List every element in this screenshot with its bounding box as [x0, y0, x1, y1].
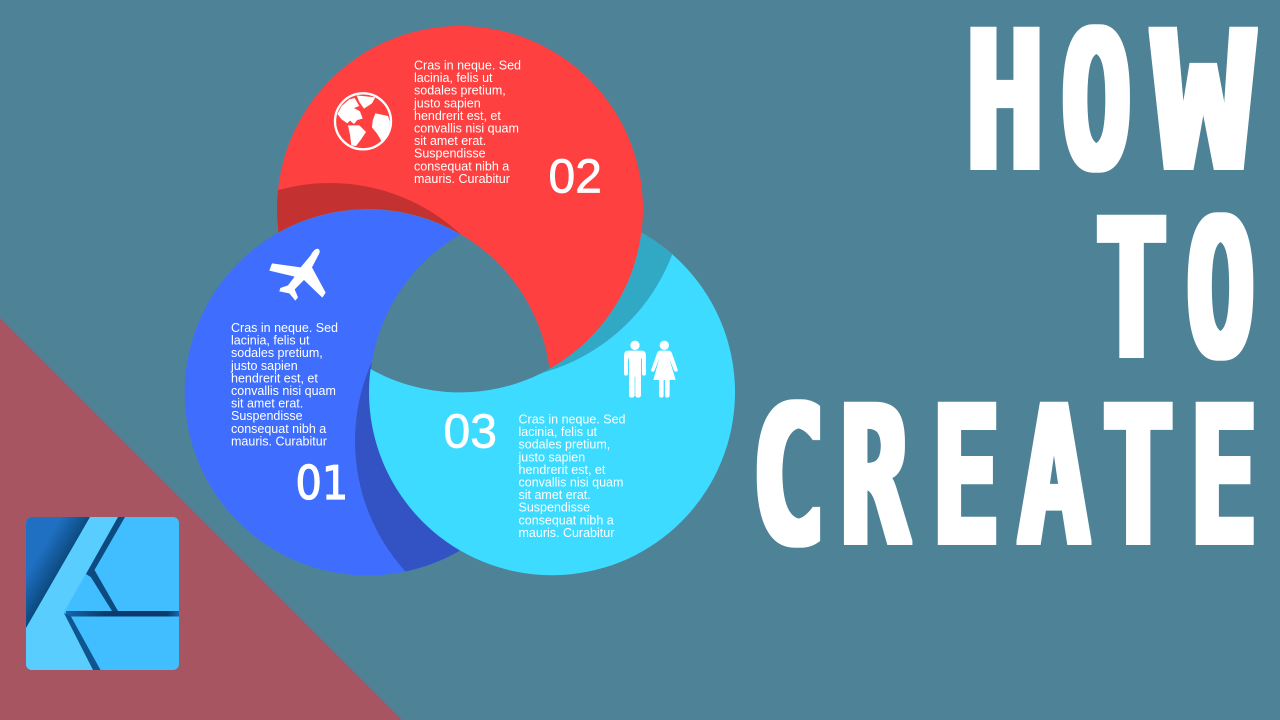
text block 02: sit amet erat. [414, 134, 486, 148]
text block 03: mauris. Curabitur [518, 526, 614, 540]
text block 02: hendrerit est, et [414, 109, 501, 123]
text block 03: lacinia, felis ut [518, 425, 598, 439]
title: HOW TO CREATE [751, 0, 1258, 589]
title line: HOW [964, 0, 1258, 214]
red segment shadow [277, 183, 460, 234]
title line: TO: O [1186, 180, 1254, 402]
text block 02: convallis nisi quam [414, 122, 519, 136]
title line: CREATE: E [1190, 367, 1257, 589]
text block 01: sit amet erat. [231, 397, 303, 411]
title line: CREATE: R [840, 367, 909, 589]
text block 02: justo sapien [413, 96, 481, 110]
text block 03: justo sapien [518, 450, 585, 464]
title line: CREATE: T [1102, 367, 1175, 589]
icon: Affinity Designer logo [26, 517, 179, 670]
text block 01: hendrerit est, et [231, 371, 318, 385]
icon: airplane [269, 249, 326, 301]
panel 02: red crescent [277, 26, 643, 368]
text block 01: justo sapien [230, 359, 298, 373]
title line: TO: T [1095, 180, 1168, 402]
cyan segment shadow [542, 232, 672, 373]
number 02: 02 [548, 150, 602, 204]
title line: TO [1095, 180, 1254, 402]
text block 02: consequat nibh a [414, 159, 509, 173]
infographic artwork [0, 26, 735, 720]
icon: globe [335, 93, 391, 149]
background red triangle [0, 318, 402, 720]
blue segment shape [185, 210, 460, 576]
title line: CREATE: C [751, 367, 826, 589]
text block 02: mauris. Curabitur [414, 172, 510, 186]
number 03: 03 [444, 406, 497, 458]
title line: CREATE: E [932, 367, 1000, 589]
text block 03: hendrerit est, et [518, 463, 606, 477]
text block 01: consequat nibh a [231, 422, 326, 436]
text block 01: Cras in neque. Sed [231, 321, 338, 335]
text block 03: consequat nibh a [518, 513, 614, 527]
text block 03: convallis nisi quam [518, 476, 623, 490]
panel 01: blue crescent [184, 210, 460, 576]
cyan segment shape [369, 233, 735, 575]
red segment shape [277, 26, 643, 369]
text block 03: sit amet erat. [518, 488, 591, 502]
text block 02: Cras in neque. Sed [414, 58, 521, 72]
panel 03: cyan crescent [369, 232, 735, 576]
text block 01: convallis nisi quam [231, 384, 336, 398]
text block 02: lacinia, felis ut [414, 71, 493, 85]
text block 03: Cras in neque. Sed [518, 412, 626, 426]
text block 01: lacinia, felis ut [231, 334, 310, 348]
text block 02: sodales pretium, [414, 84, 506, 98]
text block 01: sodales pretium, [231, 346, 323, 360]
text block 03: Suspendisse [518, 501, 590, 515]
text block 01: Suspendisse [231, 409, 303, 423]
number 01: 01 [296, 457, 348, 511]
text block 02: Suspendisse [414, 147, 486, 161]
blue segment shadow [355, 362, 460, 572]
text block 01: mauris. Curabitur [231, 434, 327, 448]
title line: CREATE [751, 367, 1257, 589]
text block 03: sodales pretium, [518, 438, 610, 452]
title line: CREATE: A [1018, 367, 1089, 589]
icon: man and woman [624, 341, 678, 398]
